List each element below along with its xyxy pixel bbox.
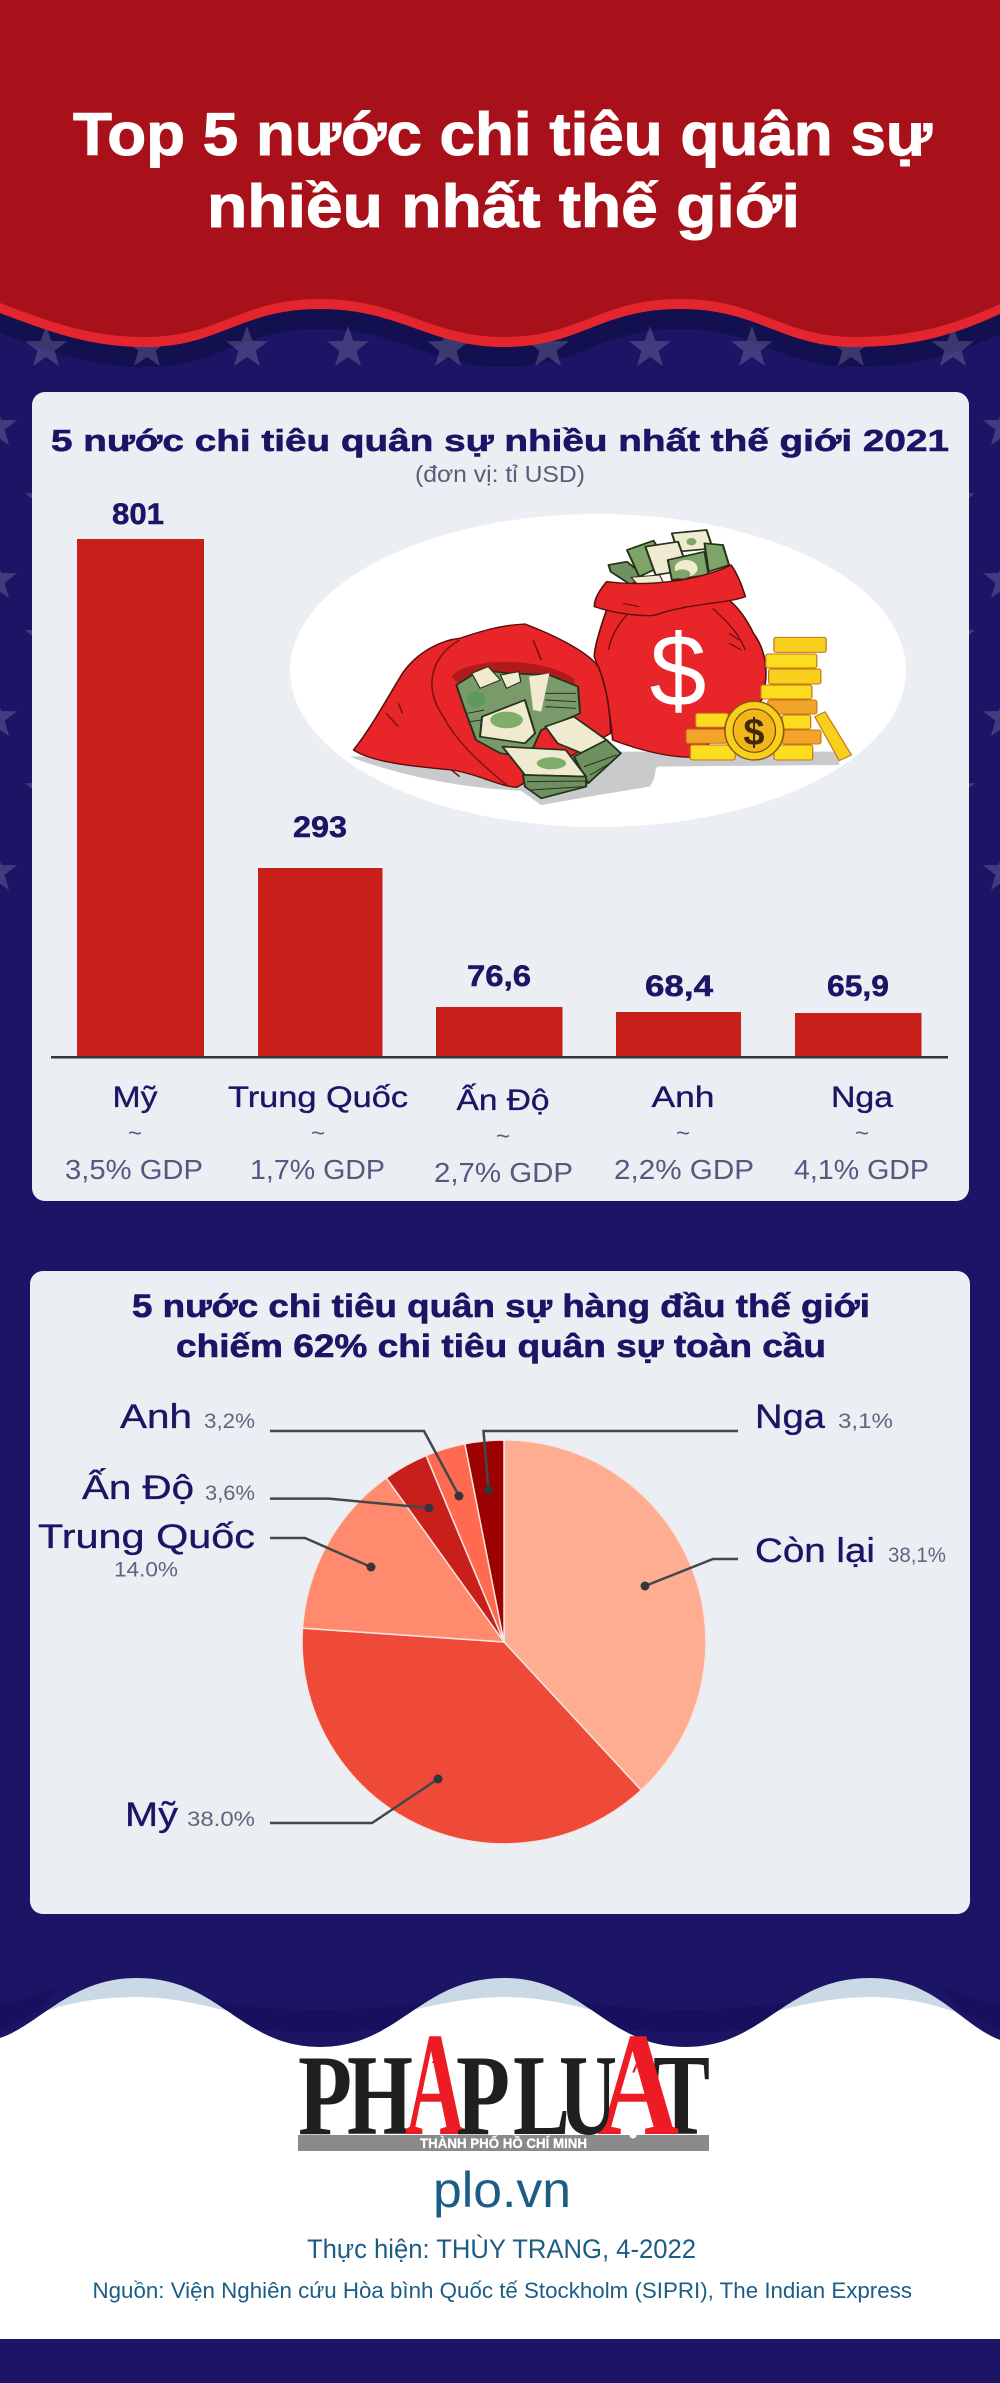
footer panel	[0, 1970, 1000, 2339]
callout: Trung Quốc: 14.0%	[114, 1558, 178, 1582]
callout: Ấn Độ: 3,6%	[205, 1482, 255, 1505]
callout: Trung Quốc: Trung Quốc	[38, 1518, 255, 1556]
logo: Pháp Luật	[298, 2003, 710, 2167]
callout: Trung Quốc	[38, 1518, 376, 1582]
country labels	[65, 1081, 929, 1188]
bar chart	[51, 498, 948, 1058]
country labels: 3,5% GDP	[65, 1154, 203, 1185]
illustration: money bags	[290, 514, 906, 827]
panel: bar chart card	[32, 392, 969, 1201]
card heading: chiếm 62% chi tiêu quân sự toàn cầu	[176, 1328, 826, 1364]
country labels: 2,7% GDP	[434, 1157, 573, 1188]
logo: Pháp Luật: A	[405, 2003, 465, 2167]
bar: Nga	[795, 970, 922, 1057]
country labels: 4,1% GDP	[794, 1154, 929, 1185]
callout: Nga: Nga	[755, 1398, 825, 1436]
country labels: ~	[855, 1120, 869, 1147]
coins	[686, 637, 851, 761]
callout: Mỹ: 38.0%	[187, 1808, 255, 1831]
bar: Mỹ: 801	[112, 498, 164, 531]
callout: Anh	[120, 1398, 464, 1500]
logo: Pháp Luật: A	[597, 2003, 679, 2167]
callout: Anh: Anh	[120, 1398, 192, 1436]
callout: Còn lại	[640, 1532, 946, 1590]
logo: Pháp Luật: T	[653, 2032, 710, 2160]
country labels: ~	[128, 1120, 142, 1147]
logo: Pháp Luật: L	[513, 2032, 570, 2160]
header band	[0, 0, 1000, 347]
footer wave shadows	[0, 1985, 1000, 2032]
country labels: Anh	[652, 1081, 714, 1114]
card heading: 5 nước chi tiêu quân sự hàng đầu thế giới	[132, 1288, 870, 1324]
icon: dollar sign on bag: $	[650, 614, 706, 728]
bar: Trung Quốc: 293	[293, 811, 347, 844]
logo: Pháp Luật: H	[347, 2032, 413, 2160]
callout: Anh: 3,2%	[204, 1410, 255, 1433]
bar: Nga: 65,9	[827, 970, 889, 1003]
country labels: Mỹ	[112, 1081, 158, 1114]
bar: Mỹ	[77, 498, 204, 1057]
bar: Ấn Độ	[436, 960, 562, 1057]
logo: Pháp Luật: ´	[431, 2054, 439, 2084]
credit: Thực hiện: THÙY TRANG, 4-2022	[307, 2233, 696, 2264]
country labels: Trung Quốc	[228, 1081, 408, 1114]
country labels: Nga	[831, 1081, 893, 1114]
logo: Pháp Luật: THÀNH PHỐ HỒ CHÍ MINH	[420, 2134, 587, 2151]
unit note: (đơn vị: tỉ USD)	[415, 461, 585, 487]
website: plo.vn	[433, 2162, 571, 2218]
card heading	[132, 1288, 870, 1364]
callout: Ấn Độ	[82, 1469, 434, 1512]
logo: Pháp Luật: P	[456, 2032, 510, 2160]
source: Nguồn: Viện Nghiên cứu Hòa bình Quốc tế Stockholm (SIPRI), The Indian Express	[92, 2278, 912, 2303]
bar: Anh	[616, 970, 741, 1057]
country labels: ~	[496, 1123, 510, 1150]
bar: Trung Quốc	[258, 811, 382, 1057]
country labels: 1,7% GDP	[250, 1154, 385, 1185]
country labels: ~	[311, 1120, 325, 1147]
star pattern	[0, 326, 1000, 890]
icon: dollar sign on coin: $	[743, 712, 765, 754]
right bag	[594, 600, 766, 757]
panel: pie chart card	[30, 1271, 970, 1914]
country labels: 2,2% GDP	[614, 1154, 754, 1185]
title: Top 5 nước chi tiêu quân sự	[73, 101, 933, 168]
callout: Mỹ: Mỹ	[125, 1796, 178, 1834]
card heading: 5 nước chi tiêu quân sự nhiều nhất thế giới 2021	[51, 423, 949, 458]
logo: Pháp Luật: ^	[632, 2058, 645, 2083]
callout: Nga	[484, 1398, 893, 1494]
logo: Pháp Luật: U	[559, 2032, 617, 2160]
logo: Pháp Luật: P	[298, 2032, 352, 2160]
pie chart	[302, 1440, 706, 1844]
left bag	[353, 624, 611, 787]
bar: Anh: 68,4	[645, 970, 713, 1003]
bar: Ấn Độ: 76,6	[467, 960, 531, 993]
header wave shadow	[0, 30, 1000, 367]
callout: Ấn Độ: Ấn Độ	[82, 1469, 194, 1507]
callout: Còn lại: Còn lại	[755, 1532, 875, 1570]
callout: Nga: 3,1%	[838, 1410, 893, 1433]
title	[73, 101, 933, 240]
callout: Mỹ	[125, 1774, 442, 1834]
title: nhiều nhất thế giới	[207, 173, 800, 240]
callout: Còn lại: 38,1%	[888, 1544, 946, 1567]
country labels: Ấn Độ	[456, 1083, 550, 1117]
country labels: ~	[676, 1120, 690, 1147]
